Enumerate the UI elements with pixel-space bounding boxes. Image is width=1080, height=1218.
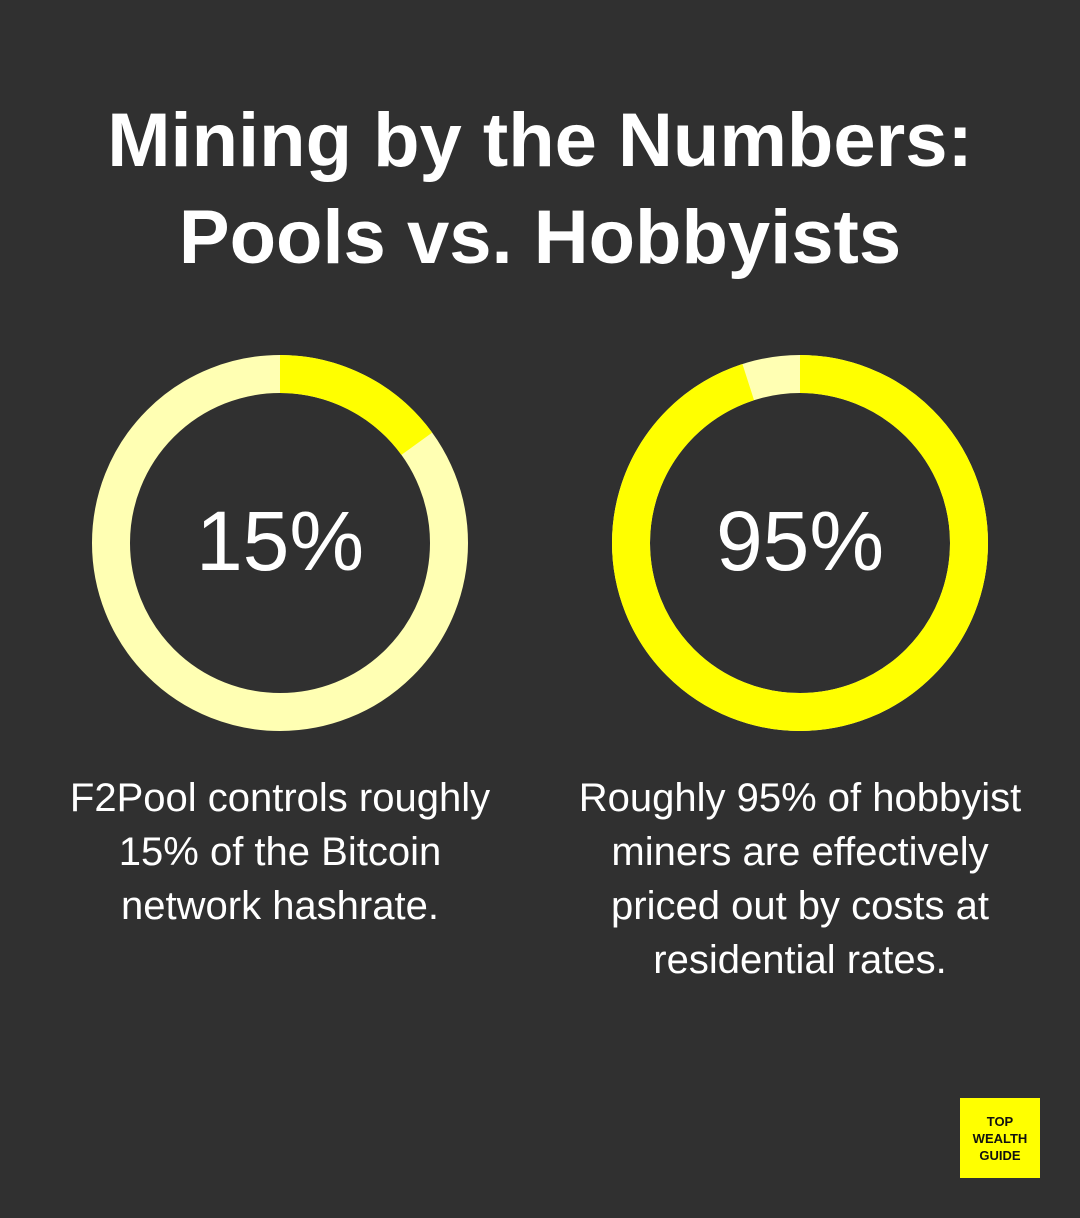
- donut chart: 95%: 95%: [716, 494, 884, 588]
- caption: F2Pool: network hashrate.: [121, 884, 439, 928]
- title: [107, 98, 973, 280]
- title: Mining by the Numbers:: [107, 98, 973, 183]
- logo: WEALTH: [973, 1130, 1027, 1146]
- donut chart: 15%: 15%: [196, 494, 364, 588]
- caption: F2Pool: 15% of the Bitcoin: [119, 830, 441, 874]
- caption: hobbyists: priced out by costs at: [611, 884, 989, 928]
- caption: hobbyists: residential rates.: [653, 938, 947, 982]
- caption: hobbyists: Roughly 95% of hobbyist: [579, 776, 1021, 820]
- caption: F2Pool: F2Pool controls roughly: [70, 776, 490, 820]
- donut chart: 95%: [612, 355, 988, 731]
- title: Pools vs. Hobbyists: [179, 195, 901, 280]
- logo: GUIDE: [979, 1148, 1021, 1162]
- caption: F2Pool: [70, 776, 490, 928]
- caption: hobbyists: miners are effectively: [611, 830, 989, 874]
- donut chart: 15%: [92, 355, 468, 731]
- caption: hobbyists: [579, 776, 1021, 982]
- logo: TOP: [987, 1114, 1013, 1128]
- logo: [960, 1098, 1040, 1178]
